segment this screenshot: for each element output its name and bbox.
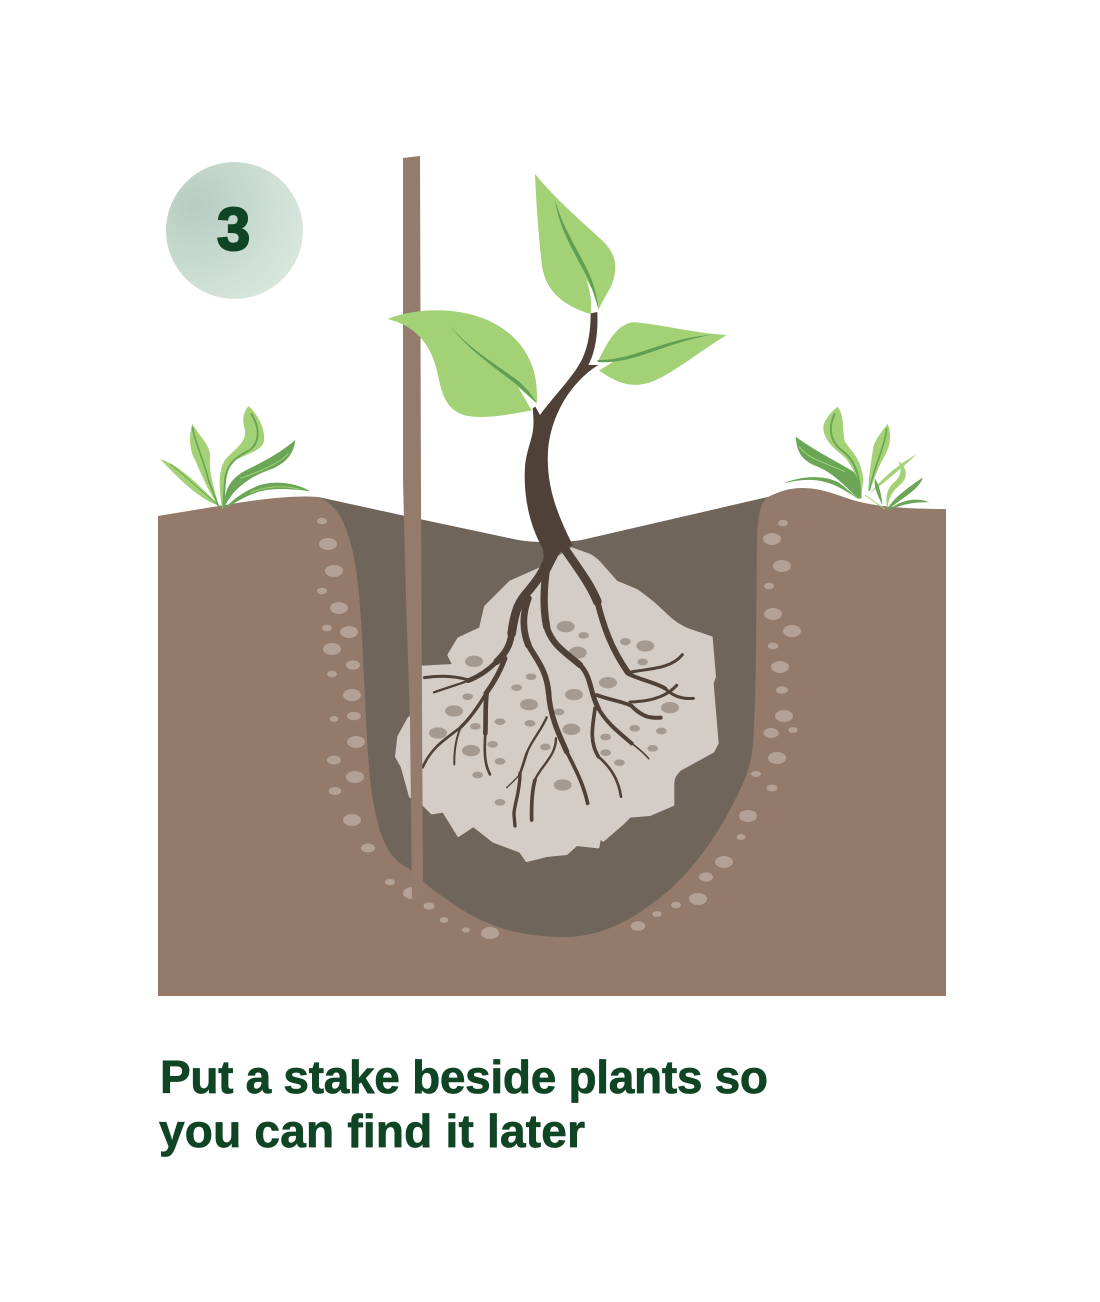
roots: [423, 547, 693, 826]
soil ground: [158, 488, 946, 996]
grass tuft right: [783, 407, 929, 511]
root ball soil: [396, 548, 718, 861]
stake: [403, 156, 423, 900]
soil stones: right wall: [631, 520, 801, 931]
caption heading: [159, 1051, 768, 1157]
step number badge: [166, 162, 303, 299]
left leaf: [387, 310, 537, 417]
root ball: [396, 547, 718, 861]
seedling: [387, 174, 727, 572]
caption heading: Put a stake beside plants so: [160, 1051, 768, 1103]
root ball stones: [429, 621, 679, 806]
planting hole: [318, 497, 768, 937]
soil stones: left wall: [317, 518, 499, 939]
right leaf: [598, 322, 727, 385]
grass tuft left: [160, 406, 310, 510]
top leaf: [535, 174, 615, 314]
trunk: [525, 312, 598, 572]
step number badge: 3: [217, 196, 250, 263]
caption heading: you can find it later: [159, 1105, 585, 1157]
